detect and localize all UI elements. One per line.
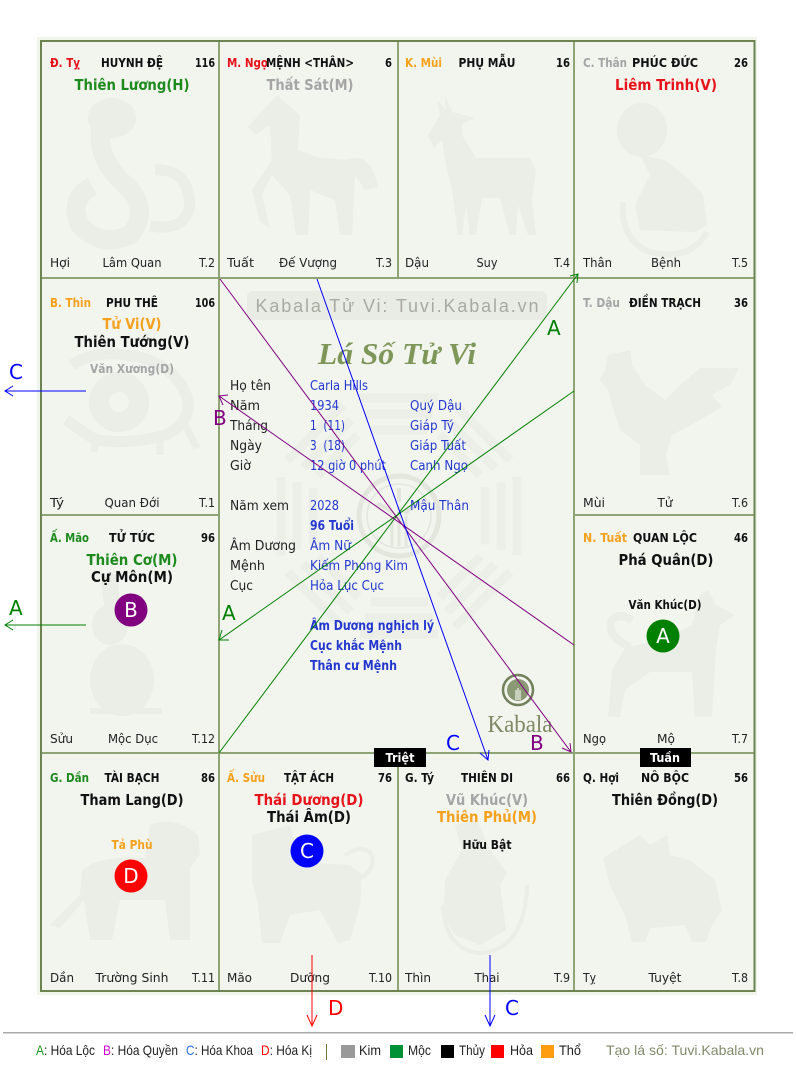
zodiac watermarks (50, 95, 739, 953)
palace: Ấ. Sửu: Mão (227, 970, 252, 985)
birth info table: 2028 (310, 499, 339, 514)
palace: N. Tuất: Phá Quân(D) (618, 551, 714, 569)
palace: Đ. Tỵ: Thiên Lương(H) (74, 76, 190, 94)
birth info table: Ngày (230, 439, 262, 454)
birth info table (229, 379, 469, 674)
arrow letters: A (222, 601, 236, 625)
birth info table: Cục khắc Mệnh (310, 639, 402, 654)
arrow letters: B (213, 406, 227, 430)
palace: M. Ngọ (226, 55, 392, 270)
palace: M. Ngọ: M. Ngọ (227, 55, 268, 70)
tag: Triệt (374, 748, 426, 767)
footer divider (3, 1032, 793, 1034)
palace: Ấ. Sửu: T.10 (368, 970, 392, 985)
arrow letters: C (446, 731, 460, 755)
palace: G. Tý: Thìn (404, 970, 431, 985)
palace: G. Tý: Hữu Bật (462, 838, 512, 852)
palace: G. Dần: G. Dần (50, 770, 89, 785)
palace: B. Thìn: Thiên Tướng(V) (74, 333, 190, 351)
legend: tứ hóa: D: Hóa Kị (261, 1042, 312, 1058)
bagua watermark (281, 398, 517, 634)
logo: Kabala: Kabala (488, 712, 553, 738)
palace: K. Mùi: Suy (476, 255, 498, 270)
palace: M. Ngọ: Đế Vượng (279, 255, 337, 270)
badge: C (290, 834, 324, 868)
title: Lá Số Tử Vi: Lá Số Tử Vi (317, 336, 476, 371)
palace: K. Mùi: 16 (556, 55, 570, 70)
palace: Đ. Tỵ: Lâm Quan (102, 255, 162, 270)
palace: M. Ngọ: Thất Sát(M) (266, 76, 354, 94)
birth info table: Canh Ngọ (410, 459, 468, 474)
palace: T. Dậu: ĐIỀN TRẠCH (629, 293, 701, 310)
legend: ngũ hành: Hỏa (510, 1042, 533, 1058)
birth info table: Kiếm Phong Kim (310, 559, 408, 574)
palace: G. Dần: Dần (50, 970, 74, 985)
badge: B: B (124, 598, 138, 622)
palace: Ấ. Sửu: Dưỡng (290, 970, 330, 985)
palace: Đ. Tỵ: T.2 (198, 255, 215, 270)
icon: tiger (50, 822, 200, 940)
birth info table: 1 (11) (310, 419, 345, 434)
arrows: Hóa Khoa (C) (5, 279, 495, 1026)
birth info table: 12 giờ 0 phút (310, 459, 386, 474)
palace: N. Tuất: N. Tuất (583, 530, 627, 545)
palace: Ấ. Mão: Thiên Cơ(M) (86, 551, 178, 569)
palace: K. Mùi: Dậu (405, 255, 429, 270)
palace: G. Dần (50, 770, 215, 985)
palace: Q. Hợi: T.8 (731, 970, 748, 985)
palace: N. Tuất: Ngọ (583, 731, 606, 746)
centre watermark banner (247, 291, 547, 320)
legend: tứ hóa: C: Hóa Khoa (186, 1042, 253, 1058)
icon: snake (76, 98, 190, 240)
palace: G. Tý: T.9 (553, 970, 570, 985)
palace: Đ. Tỵ (50, 55, 215, 270)
palace: G. Tý (404, 770, 570, 985)
palace: Ấ. Mão (50, 528, 215, 746)
palace: Ấ. Mão: TỬ TỨC (109, 529, 155, 545)
arrow letters: D (328, 996, 343, 1020)
palace: M. Ngọ: Tuất (226, 255, 254, 270)
palace: Đ. Tỵ: HUYNH ĐỆ (101, 55, 163, 70)
birth info table: Tháng (229, 419, 268, 434)
icon: rabbit (90, 575, 162, 716)
palace: G. Dần: 86 (201, 770, 215, 785)
birth info table: Năm xem (230, 499, 289, 514)
icon: horse (248, 95, 378, 235)
birth info table: Âm Dương (230, 538, 296, 554)
palace: Q. Hợi: NÔ BỘC (641, 770, 689, 785)
badge: C: C (300, 839, 314, 863)
birth info table: Năm (230, 399, 260, 414)
icon: monkey (617, 103, 707, 254)
palace: B. Thìn: T.1 (198, 495, 215, 510)
palace: T. Dậu: Mùi (583, 495, 605, 510)
palace: M. Ngọ: 6 (385, 55, 392, 70)
chart grid (41, 41, 755, 991)
palace: N. Tuất: Văn Khúc(D) (628, 598, 702, 612)
badge: D (114, 860, 148, 892)
palace: K. Mùi (405, 54, 570, 270)
badge: A: A (656, 624, 670, 648)
palace: G. Tý: Thiên Phủ(M) (437, 808, 537, 826)
arrow letters (9, 316, 561, 1020)
palace: B. Thìn: PHU THÊ (106, 295, 158, 310)
tag: Tuần: Tuần (650, 751, 680, 765)
palace: Ấ. Mão: Mộc Dục (108, 731, 158, 746)
palace: N. Tuất (583, 530, 748, 746)
palace: G. Dần: Tham Lang(D) (80, 791, 184, 809)
palace: Ấ. Sửu: 76 (378, 770, 392, 785)
arrow letters: A (547, 316, 561, 340)
arrow letters: B (530, 731, 544, 755)
footer legend (36, 1042, 764, 1060)
palace: B. Thìn: Quan Đới (104, 495, 160, 510)
icon: goat (428, 95, 536, 235)
palace: Q. Hợi: Tuyệt (648, 970, 682, 985)
palace: C. Thân: Liêm Trinh(V) (615, 76, 717, 94)
palace: Ấ. Sửu: Thái Dương(D) (254, 791, 364, 809)
icon: dog (608, 590, 735, 717)
palace: Ấ. Sửu (227, 768, 392, 985)
icon: pig (603, 835, 722, 942)
palace: Ấ. Sửu: TẬT ÁCH (284, 770, 334, 785)
palace: T. Dậu: T.6 (731, 495, 748, 510)
birth info table: Cục (230, 579, 253, 594)
palace: Đ. Tỵ: 116 (195, 55, 215, 70)
icon: rat (443, 820, 527, 953)
palace: Ấ. Sửu: Ấ. Sửu (227, 768, 265, 785)
birth info table: Họ tên (230, 379, 271, 394)
palace: Q. Hợi: Tỵ (582, 970, 597, 985)
palace: B. Thìn: 106 (195, 295, 215, 310)
palace: B. Thìn (49, 295, 215, 510)
legend: ngũ hành: Kim (359, 1042, 381, 1058)
palace: N. Tuất: 46 (734, 530, 748, 545)
palace: N. Tuất: Mộ (657, 731, 675, 746)
birth info table: 3 (18) (310, 439, 345, 454)
palace: K. Mùi: T.4 (553, 255, 570, 270)
palace: Q. Hợi (582, 770, 748, 985)
icon: rooster (599, 350, 739, 475)
palace: C. Thân: C. Thân (583, 55, 627, 70)
birth info table: Hỏa Lục Cục (310, 579, 384, 594)
palace: K. Mùi: K. Mùi (405, 55, 442, 70)
palace: G. Tý: Vũ Khúc(V) (446, 791, 528, 809)
palace: G. Dần: TÀI BẠCH (104, 770, 160, 785)
birth info table: Mậu Thân (410, 499, 469, 514)
birth info table: Thân cư Mệnh (310, 659, 397, 674)
palace: G. Dần: Tả Phù (112, 838, 152, 852)
legend: tứ hóa: B: Hóa Quyền (103, 1042, 178, 1058)
badge: A (646, 620, 680, 652)
legend: ngũ hành: Thổ (559, 1042, 581, 1058)
legend: ngũ hành: Thủy (459, 1042, 485, 1058)
palace: Ấ. Mão: T.12 (191, 731, 215, 746)
arrow: Hóa Kị (D) (307, 955, 317, 1026)
birth info table: Âm Dương nghịch lý (310, 618, 434, 634)
birth info table: 1934 (310, 399, 339, 414)
arrow letters: C (9, 360, 23, 384)
palace: B. Thìn: Văn Xương(D) (90, 362, 174, 376)
palace: T. Dậu: 36 (734, 295, 748, 310)
icon: ox (252, 825, 373, 943)
palace: G. Tý: Thai (474, 970, 500, 985)
palace: T. Dậu: T. Dậu (583, 295, 620, 310)
palace: G. Tý: 66 (556, 770, 570, 785)
arrow letters: A (9, 596, 23, 620)
tag: Triệt: Triệt (386, 751, 415, 765)
palace: K. Mùi: PHỤ MẪU (458, 54, 516, 70)
palace: T. Dậu: Tử (657, 495, 674, 510)
palace: Ấ. Mão: Sửu (50, 731, 73, 746)
arrows: Hóa Lộc (A) (5, 274, 578, 753)
palace: C. Thân: Bệnh (651, 255, 681, 270)
palace: Ấ. Mão: Cự Môn(M) (91, 568, 173, 586)
birth info table: Giáp Tuất (410, 439, 466, 454)
palace: B. Thìn: B. Thìn (50, 295, 91, 310)
legend: ngũ hành (341, 1042, 581, 1058)
palace: B. Thìn: Tý (49, 495, 65, 510)
palace: M. Ngọ: MỆNH <THÂN> (266, 55, 354, 70)
birth info table: Giờ (230, 459, 251, 474)
legend: tứ hóa: A: Hóa Lộc (36, 1042, 95, 1058)
tag: Tuần (640, 748, 691, 767)
legend: ngũ hành: Mộc (408, 1042, 431, 1058)
birth info table: Giáp Tý (410, 419, 454, 434)
badge: B (114, 594, 148, 626)
palace: G. Dần: Trường Sinh (95, 970, 168, 985)
palace: Q. Hợi: Q. Hợi (583, 770, 619, 785)
palace: Ấ. Mão: Ấ. Mão (50, 528, 89, 545)
palace: Q. Hợi: 56 (734, 770, 748, 785)
arrow letters: C (505, 996, 519, 1020)
palace: G. Tý: THIÊN DI (461, 770, 513, 785)
palace: B. Thìn: Tử Vi(V) (102, 315, 162, 333)
palace: Đ. Tỵ: Hợi (50, 255, 70, 270)
birth info table: Âm Nữ (310, 538, 352, 554)
icon: dragon (66, 354, 197, 455)
palace: N. Tuất: QUAN LỘC (633, 530, 697, 545)
palace: C. Thân: PHÚC ĐỨC (632, 55, 698, 70)
palace: N. Tuất: T.7 (731, 731, 748, 746)
footer link: Tạo lá số: Tuvi.Kabala.vn (606, 1042, 764, 1058)
palace: C. Thân: Thân (582, 255, 612, 270)
birth info table: Mệnh (230, 559, 265, 574)
palace: T. Dậu (583, 293, 748, 510)
legend: tứ hóa (36, 1042, 312, 1058)
birth info table: Carla Hills (310, 379, 368, 394)
birth info table: 96 Tuổi (310, 518, 354, 534)
palace: C. Thân: 26 (734, 55, 748, 70)
arrows: Hóa Quyền (B) (219, 279, 574, 752)
palace: Ấ. Mão: 96 (201, 530, 215, 545)
birth info table: Quý Dậu (410, 399, 462, 414)
logo: Kabala (488, 675, 553, 738)
palace: C. Thân: T.5 (731, 255, 748, 270)
badge: D: D (123, 864, 139, 888)
palace: Q. Hợi: Thiên Đồng(D) (612, 790, 718, 809)
palace: G. Dần: T.11 (191, 970, 215, 985)
palace: M. Ngọ: T.3 (375, 255, 392, 270)
centre watermark banner: Kabala Tử Vi: Tuvi.Kabala.vn (256, 296, 538, 316)
palace: G. Tý: G. Tý (405, 770, 434, 785)
palace: Ấ. Sửu: Thái Âm(D) (267, 807, 351, 826)
palace: Đ. Tỵ: Đ. Tỵ (50, 55, 80, 70)
palace: C. Thân (582, 55, 748, 270)
